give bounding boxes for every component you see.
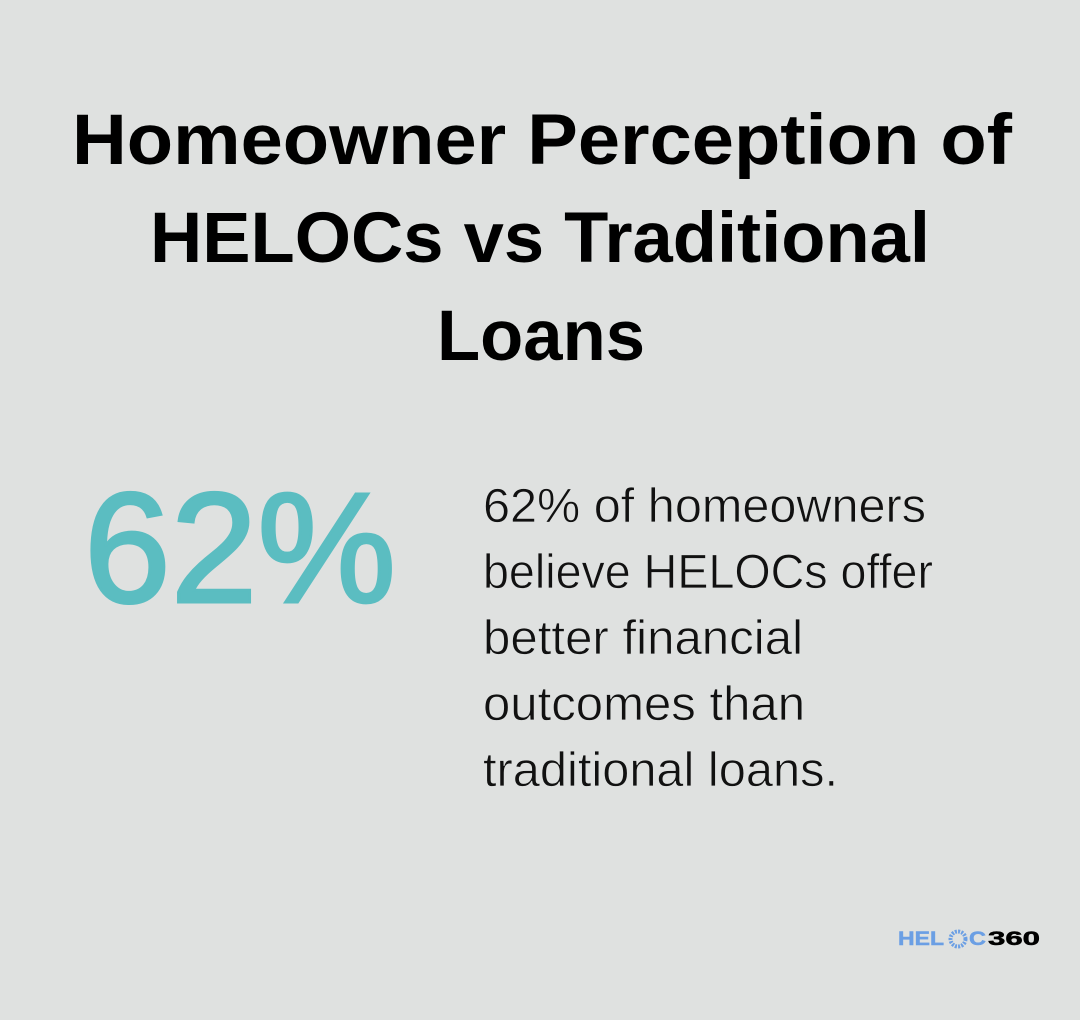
- big statistic: 62%: 62%: [84, 461, 396, 636]
- description text: traditional loans.: [483, 744, 838, 797]
- description text: better financial: [483, 612, 803, 665]
- logo: HELOC360: [898, 929, 1040, 950]
- description text: believe HELOCs offer: [483, 546, 933, 599]
- description text: 62% of homeowners: [483, 480, 926, 533]
- title: HELOCs vs Traditional: [150, 199, 930, 278]
- title: Homeowner Perception of: [72, 101, 1012, 180]
- title: Loans: [437, 297, 645, 376]
- logo: HELOC360: HEL: [898, 929, 944, 950]
- logo: HELOC360: 360: [988, 929, 1040, 950]
- logo: HELOC360: C: [969, 929, 986, 950]
- description text: [483, 480, 933, 797]
- description text: outcomes than: [483, 678, 805, 731]
- logo swirl icon: [950, 932, 966, 946]
- title: [72, 101, 1012, 376]
